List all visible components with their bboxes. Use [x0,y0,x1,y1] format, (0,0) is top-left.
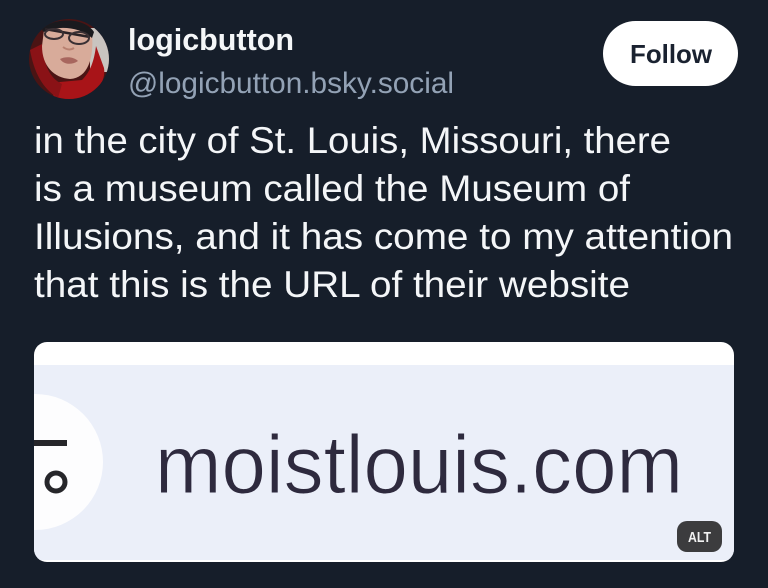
post text: is a museum called the Museum of [34,168,631,209]
alt badge: ALT [688,530,711,546]
site icon circle [34,394,103,530]
post text: that this is the URL of their website [34,264,630,305]
post text: Illusions, and it has come to my attention [34,216,733,257]
image card: url screenshot [0,342,734,562]
follow button [603,21,738,86]
display name: logicbutton [128,22,294,57]
handle: @logicbutton.bsky.social [128,67,454,100]
alt badge [677,521,722,552]
url text: moistlouis.com [155,418,683,511]
post text [34,120,733,305]
post text: in the city of St. Louis, Missouri, there [34,120,671,161]
avatar [29,19,110,100]
follow button: Follow [630,39,713,69]
